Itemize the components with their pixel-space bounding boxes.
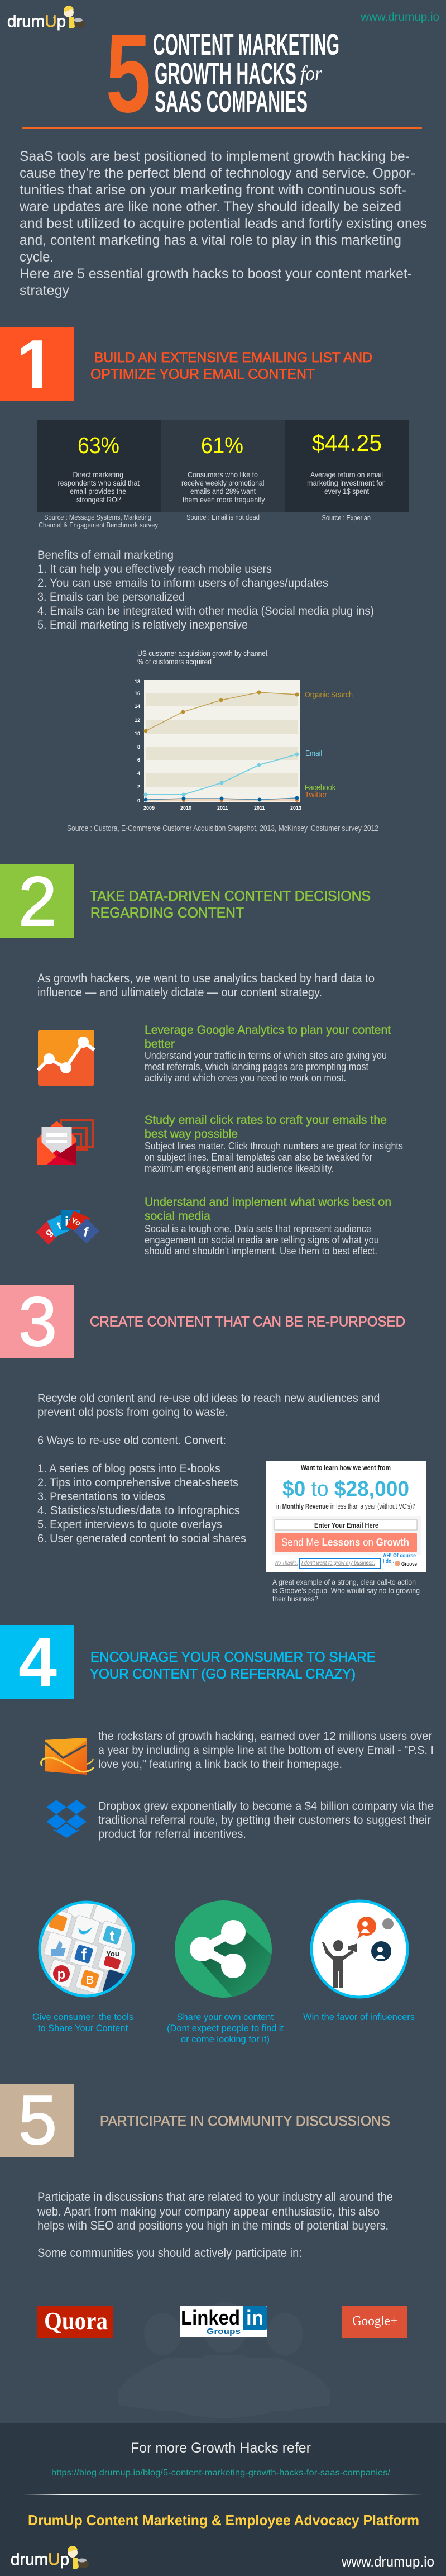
circle image: influencers — [311, 1901, 407, 1997]
intro paragraph: and, content marketing has a vital role to play in this marketing — [20, 232, 401, 248]
stat sources: Channel & Engagement Benchmark survey — [39, 521, 158, 529]
section 2 heading — [90, 888, 371, 921]
list of six ways — [37, 1462, 246, 1545]
series labels: Facebook — [305, 783, 335, 792]
circle image: social keyboard: B — [86, 1974, 94, 1986]
x axis labels: 2011 — [217, 805, 228, 811]
hack: google analytics: Understand your traffic in terms of which sites are giving you — [145, 1050, 387, 1061]
background watermark: people — [118, 2302, 330, 2418]
hack: google analytics: activity and which ones you need to work on most. — [145, 1072, 346, 1083]
section 2 intro: As growth hackers, we want to use analytics backed by hard data to — [37, 971, 375, 985]
dropbox text: traditional referral route, by getting their customers to suggest their — [98, 1814, 431, 1827]
number badge 1: 1 — [16, 326, 55, 403]
icon: email click rates — [37, 1120, 93, 1165]
circle image: social keyboard — [38, 1901, 135, 1997]
intro paragraph: cycle. — [20, 249, 54, 265]
footer prompt: For more Growth Hacks refer — [131, 2440, 311, 2456]
hack: email click rates: Subject lines matter. Click through numbers are great for insights — [145, 1140, 403, 1152]
popup caption: A great example of a strong, clear call-to action — [272, 1577, 416, 1586]
website url top: www.drumup.io — [360, 11, 439, 23]
logo: linkedin groups: Linked — [181, 2306, 240, 2329]
intro paragraph: SaaS tools are best positioned to implement growth hacking be- — [20, 149, 410, 164]
circle image: social keyboard: p — [57, 1967, 65, 1982]
circle captions: Win the favor of influencers — [303, 2012, 415, 2022]
list of six ways: 5. Expert interviews to quote overlays — [37, 1518, 222, 1531]
stat card 63% — [37, 420, 161, 512]
section 5 text: helps with SEO and positions you high in the minds of potential buyers. — [37, 2218, 389, 2232]
circle captions: to Share Your Content — [38, 2023, 128, 2033]
logo: drumUp top: drumUp — [7, 12, 66, 31]
number badge 5: 5 — [18, 2082, 57, 2159]
hack: email click rates — [145, 1114, 403, 1174]
intro paragraph — [19, 149, 427, 298]
hack: google analytics — [145, 1024, 391, 1083]
section 1 heading — [90, 350, 372, 382]
stat sources: Source : Experian — [322, 514, 371, 522]
benefits list: 5. Email marketing is relatively inexpensive — [37, 619, 248, 631]
intro paragraph: and best utilized to acquire potential leads and fortify existing ones — [20, 216, 427, 231]
logo: quora: Quora — [44, 2307, 108, 2335]
groove popup example: No Thanks, — [275, 1560, 298, 1566]
icon: google analytics — [38, 1030, 94, 1086]
circle captions: (Dont expect people to find it — [167, 2023, 284, 2033]
stat sources — [39, 513, 371, 529]
series twitter — [146, 799, 299, 802]
benefits list: 3. Emails can be personalized — [37, 591, 185, 603]
hack: email click rates: best way possible — [145, 1128, 238, 1140]
popup caption: is Groove's popup. Who would say no to growing — [272, 1586, 420, 1595]
stat card $44.25: $44.25 — [312, 430, 382, 456]
number badge 5 — [0, 2082, 74, 2159]
list of six ways: 3. Presentations to videos — [37, 1490, 165, 1503]
groove popup example: Enter Your Email Here — [314, 1521, 378, 1529]
y axis labels: 14 — [135, 704, 140, 709]
x axis labels: 2013 — [290, 805, 301, 811]
icon: hotmail — [41, 1738, 94, 1775]
dropbox text: product for referral incentives. — [98, 1828, 246, 1841]
hotmail text: the rockstars of growth hacking, earned over 12 millions users over — [98, 1730, 432, 1743]
circle image: share icon — [175, 1900, 272, 1998]
popup caption — [272, 1577, 420, 1603]
stat card 61%: Consumers who like to — [188, 470, 258, 479]
benefits list: 1. It can help you effectively reach mobile users — [37, 563, 272, 576]
section 2 intro — [37, 971, 375, 999]
groove popup example: I do.. — [383, 1558, 394, 1565]
footer platform line: DrumUp Content Marketing & Employee Advocacy Platform — [28, 2512, 419, 2529]
hack: social media: Understand and implement what works best on — [145, 1196, 391, 1209]
stat card 61%: receive weekly promotional — [181, 478, 265, 487]
number badge 4: 4 — [18, 1624, 57, 1701]
groove popup example: Groove — [401, 1561, 417, 1567]
list of six ways: 4. Statistics/studies/data to Infographics — [37, 1504, 240, 1517]
popup caption: their business? — [272, 1594, 318, 1603]
stat card 61%: 61% — [201, 432, 243, 458]
circle captions: Give consumer the tools — [32, 2012, 133, 2022]
benefits list — [37, 549, 374, 631]
icon: dropbox — [46, 1800, 87, 1838]
stat card 61%: them even more frequently — [183, 495, 265, 504]
number badge 4 — [0, 1624, 74, 1701]
icon: social media tiles: g — [42, 1226, 55, 1238]
logo: linkedin groups: in — [246, 2306, 263, 2329]
circle image: social keyboard: f — [81, 1946, 87, 1963]
list of six ways: 1. A series of blog posts into E-books — [37, 1462, 220, 1475]
stat card 63%: email provides the — [70, 487, 126, 496]
line chart — [135, 679, 353, 811]
benefits list: 4. Emails can be integrated with other media (Social media plug ins) — [37, 605, 374, 617]
logo: linkedin groups — [180, 2306, 267, 2337]
section 5 text: web. Apart from making your company appear enthusiastic, this also — [37, 2204, 380, 2218]
number badge 3 — [0, 1284, 74, 1361]
series email — [144, 752, 299, 797]
stat card 63%: strongest ROI* — [76, 495, 122, 504]
hack: social media: should and shouldn't implement. Use them to best effect. — [145, 1246, 377, 1257]
y axis labels: 2 — [137, 784, 140, 790]
logo: google plus: Google+ — [352, 2314, 397, 2328]
title line 3: SAAS COMPANIES — [155, 85, 308, 118]
section 2 — [0, 863, 403, 1257]
groove popup example: Send Me Lessons on Growth — [281, 1537, 409, 1549]
chart source: Source : Custora, E-Commerce Customer Acquisition Snapshot, 2013, McKinsey iCostumer survey 2012 — [67, 824, 378, 833]
hack: social media: engagement on social media are telling signs of what you — [145, 1234, 379, 1246]
section 1 heading: BUILD AN EXTENSIVE EMAILING LIST AND — [94, 350, 372, 365]
logo: drumUp footer: drumUp — [11, 2550, 69, 2569]
section 5 heading: PARTICIPATE IN COMMUNITY DISCUSSIONS — [100, 2113, 390, 2129]
section 1 heading: OPTIMIZE YOUR EMAIL CONTENT — [90, 367, 315, 382]
dropbox text: Dropbox grew exponentially to become a $4 billion company via the — [98, 1800, 434, 1813]
logo: linkedin groups: Groups — [207, 2327, 241, 2336]
section 3 — [0, 1284, 426, 1603]
chart title: % of customers acquired — [137, 657, 212, 666]
icon: social media tiles: in — [65, 1214, 76, 1229]
stat card $44.25: every 1$ spent — [324, 487, 369, 496]
section 5 text: Participate in discussions that are related to your industry all around the — [37, 2190, 393, 2204]
stat card 63%: 63% — [78, 432, 119, 458]
chart title — [137, 649, 269, 666]
logo: drumUp footer — [11, 2546, 89, 2569]
series facebook — [144, 796, 299, 801]
section 4 heading — [90, 1650, 376, 1682]
groove popup example: $0 to $28,000 — [282, 1477, 409, 1501]
number badge 3: 3 — [18, 1284, 57, 1361]
section 2 heading: REGARDING CONTENT — [90, 905, 244, 921]
footer url: www.drumup.io — [341, 2554, 434, 2570]
section 2 intro: influence — and ultimately dictate — our content strategy. — [37, 985, 322, 999]
y axis labels: 12 — [135, 717, 140, 723]
y axis labels: 8 — [137, 744, 140, 750]
x axis labels: 2011 — [254, 805, 265, 811]
hack: social media: Social is a tough one. Data sets that represent audience — [145, 1223, 371, 1234]
groove popup example: AH! Of course — [383, 1552, 416, 1559]
section 1 — [0, 326, 409, 833]
y axis labels: 4 — [137, 771, 140, 776]
circle captions: Share your own content — [176, 2012, 274, 2022]
section 4 heading: YOUR CONTENT (GO REFERRAL CRAZY) — [90, 1666, 356, 1682]
intro paragraph: Here are 5 essential growth hacks to boost your content market- — [20, 266, 412, 282]
circle captions — [32, 2012, 415, 2045]
hack: email click rates: maximum engagement and audience likeability. — [145, 1163, 334, 1174]
series labels — [305, 690, 353, 800]
stat sources: Source : Email is not dead — [186, 513, 260, 521]
section 4 — [0, 1624, 434, 2045]
y axis labels: 16 — [135, 691, 140, 696]
stat card 63%: respondents who said that — [58, 478, 140, 487]
intro paragraph: strategy — [20, 283, 69, 298]
section 5 text — [37, 2190, 393, 2260]
chart title: US customer acquisition growth by channel, — [137, 649, 269, 658]
icon: social media tiles: t — [55, 1219, 64, 1232]
y axis labels: 10 — [135, 731, 140, 736]
section 3 intro — [37, 1392, 380, 1447]
stat card 63%: Direct marketing — [73, 470, 123, 479]
footer — [0, 2423, 446, 2576]
stat card $44.25 — [285, 420, 409, 512]
number badge 2 — [0, 863, 74, 940]
hotmail text: a year by including a simple line at the bottom of every Email - "P.S. I — [98, 1744, 434, 1757]
intro paragraph: tunities that arise on your marketing front with continuous soft- — [20, 182, 406, 198]
stat card $44.25: marketing investment for — [307, 478, 385, 487]
y axis labels: 18 — [135, 679, 140, 685]
stat card 61%: emails and 28% want — [190, 487, 256, 496]
title script for: for — [300, 62, 322, 85]
number badge 1 — [0, 326, 74, 403]
series labels: Organic Search — [305, 690, 353, 700]
y axis labels: 0 — [137, 798, 140, 804]
circle image: social keyboard: You — [106, 1950, 119, 1958]
groove popup example: I don't want to grow my business. — [301, 1560, 375, 1566]
y axis labels: 6 — [137, 757, 140, 763]
icon: social media tiles — [36, 1210, 99, 1245]
section 3 intro: prevent old posts from going to waste. — [37, 1406, 228, 1419]
hack: google analytics: Leverage Google Analytics to plan your content — [145, 1024, 391, 1037]
stat card 61% — [161, 420, 285, 512]
logo: google plus — [342, 2306, 407, 2338]
x axis labels: 2010 — [180, 805, 191, 811]
logo: drumUp top — [7, 6, 85, 31]
hack: email click rates: Study email click rates to craft your emails the — [145, 1114, 387, 1127]
hotmail text — [98, 1730, 434, 1771]
series labels: Email — [305, 749, 322, 758]
section 3 intro: Recycle old content and re-use old ideas to reach new audiences and — [37, 1392, 380, 1405]
intro paragraph: ware updates are like none other. They should ideally be seized — [19, 199, 401, 215]
number badge 2: 2 — [18, 863, 57, 940]
benefits list: 2. You can use emails to inform users of changes/updates — [37, 577, 328, 590]
x axis labels: 2009 — [143, 805, 155, 811]
section 4 heading: ENCOURAGE YOUR CONSUMER TO SHARE — [90, 1650, 376, 1665]
title number 5: 5 — [106, 11, 151, 136]
hack: google analytics: better — [145, 1038, 175, 1051]
groove popup example: Want to learn how we went from — [301, 1464, 391, 1472]
stat card $44.25: Average return on email — [310, 470, 383, 479]
title divider — [22, 127, 422, 129]
title — [106, 11, 339, 136]
icon: social media tiles: You — [70, 1215, 87, 1230]
circle image: social keyboard: t — [110, 1927, 115, 1944]
dropbox text — [98, 1800, 434, 1841]
circle captions: or come looking for it) — [181, 2034, 270, 2045]
intro paragraph: cause they’re the perfect blend of technology and service. Oppor- — [20, 165, 415, 181]
stat sources: Source : Message Systems, Marketing — [44, 513, 151, 521]
x axis labels — [143, 805, 301, 811]
section 3 intro: 6 Ways to re-use old content. Convert: — [37, 1434, 226, 1447]
benefits list: Benefits of email marketing — [37, 549, 174, 562]
hack: google analytics: most referrals, which landing pages are prompting most — [145, 1061, 368, 1072]
hack: social media: social media — [145, 1210, 210, 1223]
groove popup example — [266, 1461, 426, 1572]
hotmail text: love you," featuring a link back to their homepage. — [98, 1758, 342, 1771]
series labels: Twitter — [305, 790, 327, 800]
hack: social media — [145, 1196, 391, 1257]
section 3 heading: CREATE CONTENT THAT CAN BE RE-PURPOSED — [90, 1314, 405, 1330]
list of six ways: 2. Tips into comprehensive cheat-sheets — [37, 1476, 238, 1489]
section 5 text: Some communities you should actively participate in: — [37, 2246, 302, 2260]
groove popup example: in Monthly Revenue in less than a year (without VC's)? — [276, 1503, 415, 1510]
section 5 — [0, 2082, 407, 2418]
list of six ways: 6. User generated content to social shares — [37, 1532, 246, 1545]
y axis labels — [135, 679, 140, 804]
icon: social media tiles: f — [82, 1224, 90, 1240]
hack: email click rates: on subject lines. Email templates can also be tweaked for — [145, 1152, 372, 1163]
footer link: https://blog.drumup.io/blog/5-content-marketing-growth-hacks-for-saas-companies/ — [51, 2468, 391, 2478]
series organic search — [144, 691, 299, 733]
title line 2: GROWTH HACKS — [155, 57, 296, 91]
section 2 heading: TAKE DATA-DRIVEN CONTENT DECISIONS — [90, 888, 371, 904]
